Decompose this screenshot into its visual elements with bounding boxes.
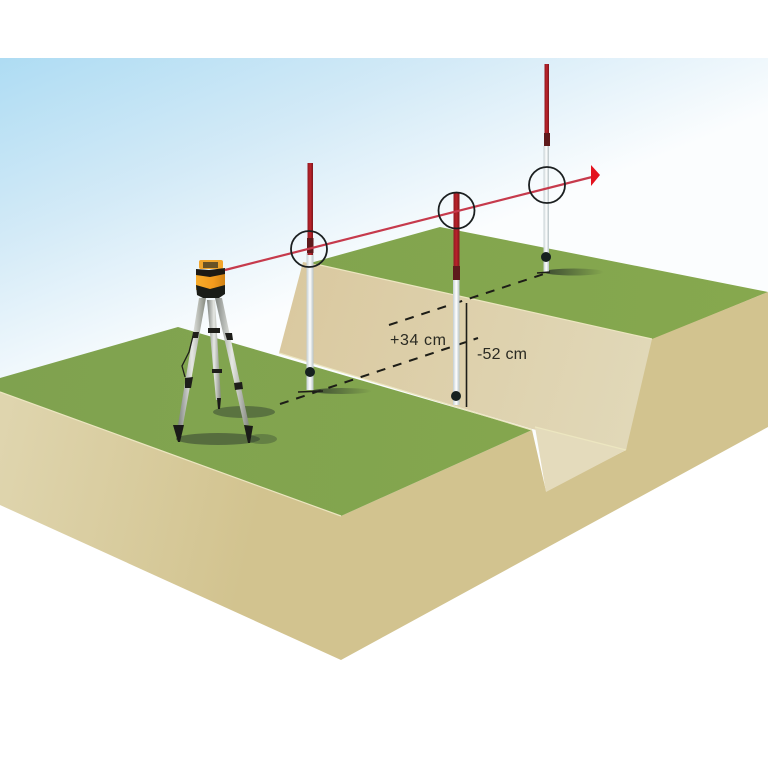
label: plus 34 cm: +34 cm bbox=[390, 332, 446, 349]
lower left terrace top bbox=[0, 327, 532, 516]
staff 3 bbox=[537, 64, 604, 276]
tripod middle leg bbox=[207, 300, 221, 400]
upper right terrace top bbox=[303, 227, 768, 340]
terrain block bbox=[0, 227, 768, 660]
sky background bbox=[0, 58, 768, 458]
laser level head bbox=[196, 260, 225, 298]
tripod clamps bbox=[185, 328, 243, 390]
trench back wall bbox=[279, 262, 657, 450]
height measure line bbox=[466, 303, 468, 407]
right block face bbox=[341, 292, 768, 660]
tripod strap bbox=[182, 336, 193, 377]
tripod bbox=[173, 298, 253, 443]
dashed baseline upper bbox=[389, 273, 547, 325]
trench floor triangle bbox=[535, 427, 626, 492]
tripod right leg bbox=[215, 298, 249, 425]
staff 2 bbox=[451, 192, 461, 405]
left block face bbox=[0, 392, 341, 660]
tripod left leg bbox=[178, 298, 206, 425]
terrace highlight edges bbox=[0, 265, 652, 516]
target circles bbox=[291, 167, 565, 267]
label: minus 52 cm: -52 cm bbox=[477, 346, 527, 363]
laser beam arrow bbox=[225, 165, 600, 270]
dashed baseline lower bbox=[280, 338, 478, 404]
staff 1 bbox=[298, 163, 372, 394]
tripod shadows bbox=[176, 406, 277, 445]
white ground below the block bbox=[0, 427, 768, 768]
